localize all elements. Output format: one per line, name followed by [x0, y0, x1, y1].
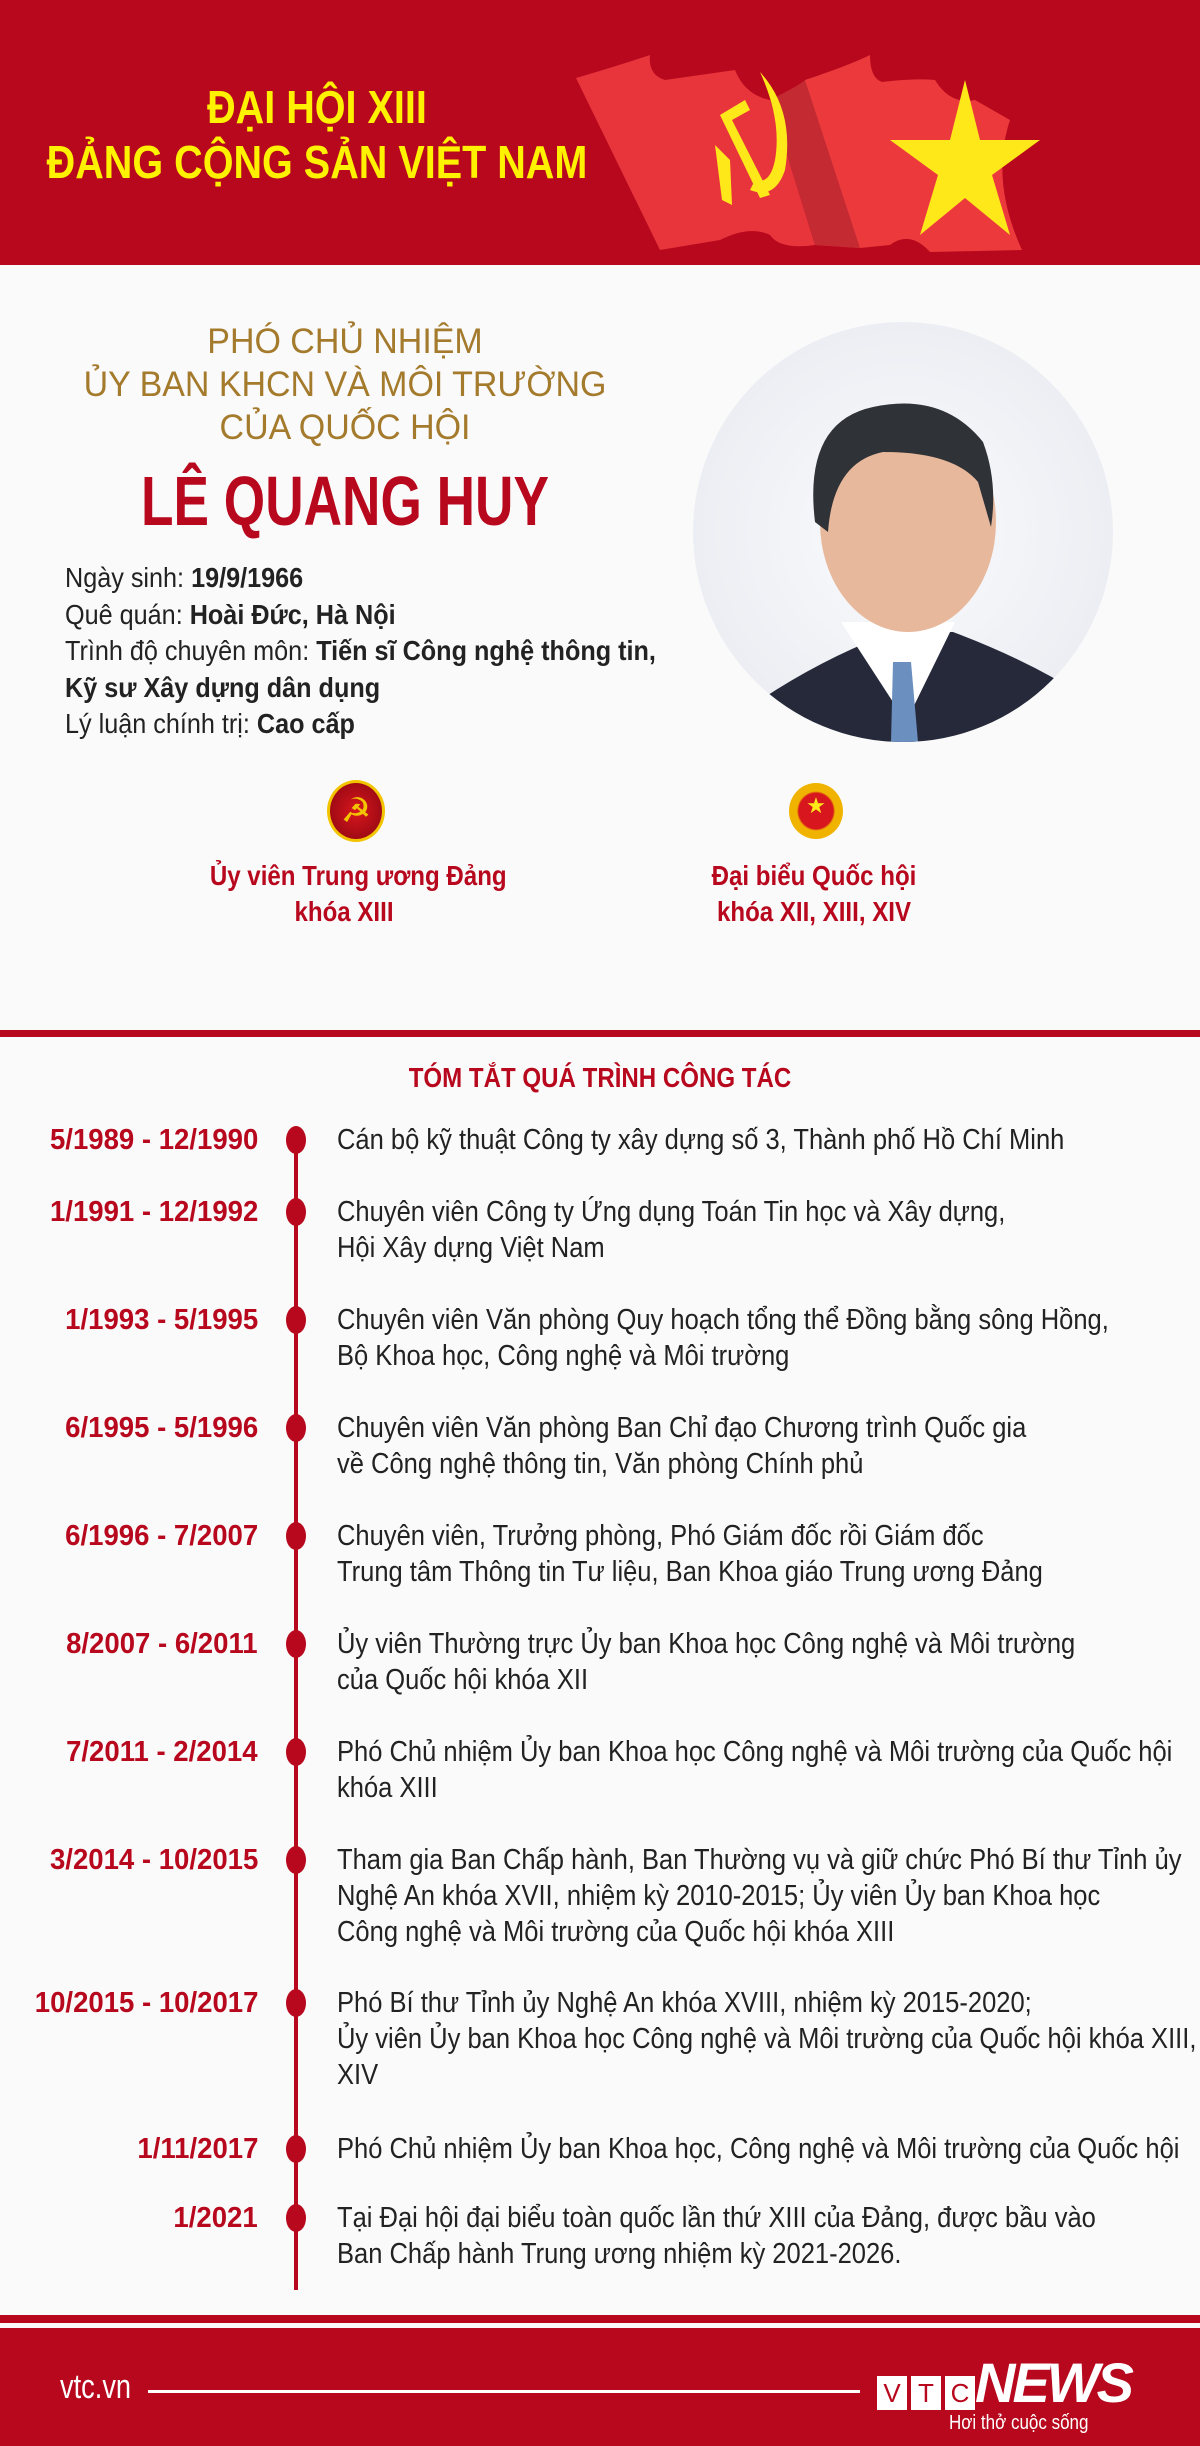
position subtitle — [84, 321, 606, 447]
position subtitle: CỦA QUỐC HỘI — [220, 408, 470, 447]
timeline entries: Bộ Khoa học, Công nghệ và Môi trường — [337, 1340, 789, 1372]
star — [890, 80, 1040, 235]
timeline entries: Phó Chủ nhiệm Ủy ban Khoa học, Công nghệ và Môi trường của Quốc hội — [337, 2133, 1179, 2165]
timeline entries: Ủy viên Thường trực Ủy ban Khoa học Công nghệ và Môi trường — [337, 1628, 1075, 1660]
timeline entries: 1/1991 - 12/1992 — [50, 1196, 258, 1228]
footer url: vtc.vn — [60, 2368, 131, 2406]
badge: party member — [210, 780, 507, 927]
timeline entries: 6/1996 - 7/2007 — [65, 1520, 258, 1552]
header title: ĐẢNG CỘNG SẢN VIỆT NAM — [47, 136, 587, 188]
personal info — [65, 562, 656, 739]
timeline entries: về Công nghệ thông tin, Văn phòng Chính phủ — [337, 1448, 863, 1480]
name: LÊ QUANG HUY — [141, 462, 549, 540]
timeline entries: 7/2011 - 2/2014 — [67, 1736, 258, 1768]
flags illustration — [576, 55, 1040, 252]
timeline entries: 1/11/2017 — [137, 2133, 258, 2165]
timeline entries: Phó Bí thư Tỉnh ủy Nghệ An khóa XVIII, nhiệm kỳ 2015-2020; — [337, 1987, 1032, 2019]
timeline entries: Chuyên viên Văn phòng Ban Chỉ đạo Chương trình Quốc gia — [337, 1412, 1026, 1444]
personal info: Quê quán: Hoài Đức, Hà Nội — [65, 598, 396, 630]
label: national assembly: Đại biểu Quốc hội — [712, 860, 916, 891]
timeline entries: Hội Xây dựng Việt Nam — [337, 1232, 605, 1264]
logo: VTC News: V — [883, 2378, 901, 2408]
timeline entries: 8/2007 - 6/2011 — [67, 1628, 258, 1660]
position subtitle: PHÓ CHỦ NHIỆM — [207, 322, 483, 361]
timeline entries: Cán bộ kỹ thuật Công ty xây dựng số 3, Thành phố Hồ Chí Minh — [337, 1124, 1064, 1156]
personal info: Lý luận chính trị: Cao cấp — [65, 708, 355, 739]
timeline entries: Tham gia Ban Chấp hành, Ban Thường vụ và giữ chức Phó Bí thư Tỉnh ủy — [337, 1844, 1182, 1876]
logo: VTC News — [877, 2351, 1134, 2434]
personal info: Trình độ chuyên môn: Tiến sĩ Công nghệ thông tin, — [65, 635, 656, 666]
label: national assembly: khóa XII, XIII, XIV — [717, 896, 911, 927]
label: party — [210, 860, 507, 927]
timeline entries: Chuyên viên, Trưởng phòng, Phó Giám đốc rồi Giám đốc — [337, 1520, 984, 1552]
icon: party emblem: ☭ — [341, 792, 371, 830]
timeline entries: Phó Chủ nhiệm Ủy ban Khoa học Công nghệ và Môi trường của Quốc hội — [337, 1736, 1172, 1768]
timeline entries: Ban Chấp hành Trung ương nhiệm kỳ 2021-2026. — [337, 2238, 901, 2270]
timeline entries: của Quốc hội khóa XII — [337, 1664, 588, 1696]
icon: national emblem — [789, 783, 843, 839]
timeline entries: 6/1995 - 5/1996 — [65, 1412, 258, 1444]
hammer and sickle — [715, 72, 787, 205]
timeline entries — [34, 1124, 1196, 2270]
label: national assembly — [712, 860, 916, 927]
icon: party emblem — [327, 780, 385, 842]
icon: national emblem: ★ — [806, 793, 826, 818]
logo: VTC News: NEWS — [975, 2351, 1131, 2414]
label: party: khóa XIII — [294, 896, 394, 927]
personal info: Kỹ sư Xây dựng dân dụng — [65, 672, 380, 702]
timeline entries: 10/2015 - 10/2017 — [34, 1987, 258, 2019]
portrait photo — [693, 322, 1113, 742]
timeline entries: Công nghệ và Môi trường của Quốc hội khóa XIII — [337, 1916, 894, 1948]
timeline entries: Chuyên viên Văn phòng Quy hoạch tổng thể Đồng bằng sông Hồng, — [337, 1304, 1109, 1336]
header title — [46, 81, 587, 188]
timeline entries: Chuyên viên Công ty Ứng dụng Toán Tin học và Xây dựng, — [337, 1196, 1005, 1228]
timeline entries: 1/2021 — [174, 2202, 258, 2234]
logo: VTC News: Hơi thở cuộc sống — [949, 2412, 1088, 2434]
personal info: Ngày sinh: 19/9/1966 — [65, 562, 303, 593]
timeline entries: Ủy viên Ủy ban Khoa học Công nghệ và Môi trường của Quốc hội khóa XIII, — [337, 2023, 1196, 2055]
section title: TÓM TẮT QUÁ TRÌNH CÔNG TÁC — [409, 1062, 791, 1093]
timeline entries: khóa XIII — [337, 1772, 438, 1804]
logo: VTC News: C — [951, 2378, 969, 2408]
header banner — [0, 0, 1200, 265]
timeline entries: XIV — [337, 2059, 378, 2091]
timeline — [294, 1154, 298, 2290]
footer — [0, 2328, 1200, 2446]
position subtitle: ỦY BAN KHCN VÀ MÔI TRƯỜNG — [84, 365, 606, 404]
logo: VTC News: T — [918, 2378, 934, 2408]
timeline entries: 3/2014 - 10/2015 — [50, 1844, 258, 1876]
timeline entries: 5/1989 - 12/1990 — [50, 1124, 258, 1156]
timeline entries: Nghệ An khóa XVII, nhiệm kỳ 2010-2015; Ủy viên Ủy ban Khoa học — [337, 1880, 1100, 1912]
timeline entries: Tại Đại hội đại biểu toàn quốc lần thứ XIII của Đảng, được bầu vào — [337, 2202, 1096, 2234]
timeline entries: 1/1993 - 5/1995 — [65, 1304, 258, 1336]
header title: ĐẠI HỘI XIII — [207, 81, 427, 133]
badge: national assembly — [712, 783, 916, 927]
timeline entries: Trung tâm Thông tin Tư liệu, Ban Khoa giáo Trung ương Đảng — [337, 1556, 1043, 1588]
label: party: Ủy viên Trung ương Đảng — [210, 860, 507, 891]
